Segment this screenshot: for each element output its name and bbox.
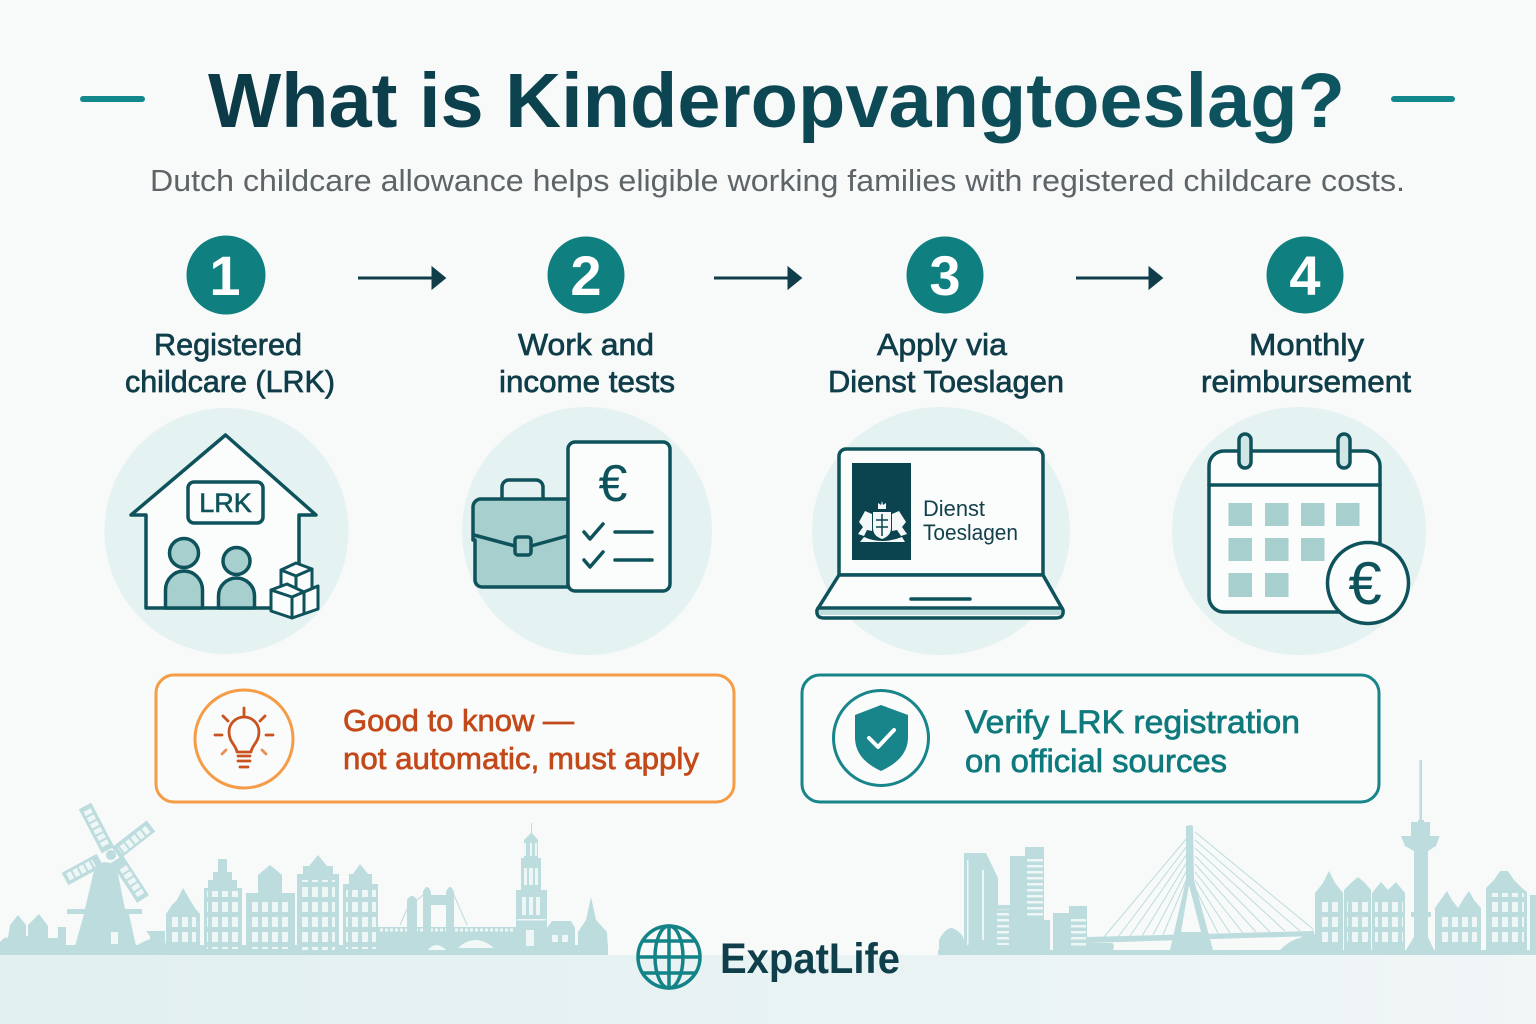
step 4 number badge: 4 xyxy=(1289,244,1321,307)
step 2 number badge: 2 xyxy=(570,244,602,307)
left skyline: windmill, canal houses, bridge, church xyxy=(0,806,608,955)
icon: calendar with euro coin: € xyxy=(1348,550,1382,617)
church tower xyxy=(516,823,547,950)
step 1 label xyxy=(125,327,335,399)
arrow 3 to 4 xyxy=(1076,269,1161,287)
small buildings and church xyxy=(547,897,608,950)
canal house 1 xyxy=(166,888,200,950)
icon: calendar with euro coin xyxy=(1172,407,1426,655)
callout text: not automatic, must apply xyxy=(343,741,700,776)
step 3 label: Dienst Toeslagen xyxy=(828,364,1064,399)
step 2 number badge xyxy=(548,236,624,314)
right skyline: towers, Erasmus bridge, houses, Euromast xyxy=(938,760,1536,955)
step 3 label xyxy=(828,327,1064,399)
low trees xyxy=(939,928,964,950)
title: What is Kinderopvangtoeslag? xyxy=(208,58,1345,144)
logo: ExpatLife xyxy=(638,926,900,988)
icon: laptop with Dienst Toeslagen: Dienst xyxy=(923,496,986,521)
arrow 1 to 2 xyxy=(358,269,444,287)
logo: ExpatLife: ExpatLife xyxy=(720,935,900,983)
step 4 xyxy=(1172,236,1426,655)
step 2 label: Work and xyxy=(518,327,654,362)
icon: shield with check xyxy=(834,690,928,786)
callout: verify LRK xyxy=(802,675,1379,802)
subtitle: Dutch childcare allowance helps eligible working families with registered childcare costs. xyxy=(150,163,1405,198)
canal house 5 xyxy=(343,864,378,950)
icon: registered childcare house: LRK xyxy=(199,488,252,518)
trees and low buildings xyxy=(0,914,165,950)
title accent line right xyxy=(1391,96,1455,102)
callout: good to know xyxy=(156,675,734,802)
step 4 label: Monthly xyxy=(1249,327,1365,362)
step 3 number badge xyxy=(906,236,984,314)
Erasmus bridge xyxy=(1087,825,1320,950)
step 2 label xyxy=(499,327,675,399)
canal house 4 xyxy=(297,855,339,950)
canal house 2 xyxy=(204,859,242,950)
step 2 label: income tests xyxy=(499,364,675,399)
Euromast xyxy=(1401,760,1440,950)
icon: laptop with Dienst Toeslagen xyxy=(812,407,1070,655)
callout text: Good to know — xyxy=(343,703,574,738)
callout text: Verify LRK registration xyxy=(965,704,1300,740)
step 1 label: Registered xyxy=(154,327,302,362)
lifting bridge xyxy=(378,887,516,950)
icon: briefcase and income document xyxy=(462,407,712,655)
step 1 number badge: 1 xyxy=(209,244,241,307)
office towers xyxy=(964,847,1087,950)
icon: laptop with Dienst Toeslagen: Toeslagen xyxy=(923,520,1018,545)
canal house 3 xyxy=(246,865,295,950)
title accent line left xyxy=(80,96,145,102)
canal houses right xyxy=(1315,871,1405,950)
step 1 label: childcare (LRK) xyxy=(125,364,335,399)
callout text: on official sources xyxy=(965,743,1227,779)
icon: briefcase and income document: € xyxy=(599,455,628,513)
icon: light bulb xyxy=(195,690,293,788)
canal houses far right xyxy=(1435,871,1527,950)
step 1 number badge xyxy=(186,236,266,314)
crest on the logo panel xyxy=(858,501,907,542)
step 4 number badge xyxy=(1266,236,1344,314)
callout text xyxy=(965,704,1300,779)
step 3 number badge: 3 xyxy=(929,244,961,307)
step 2 xyxy=(462,236,712,655)
icon: registered childcare house xyxy=(104,408,348,654)
step 4 label: reimbursement xyxy=(1201,364,1411,399)
arrow 2 to 3 xyxy=(714,269,800,287)
step 4 label xyxy=(1201,327,1411,399)
bottom pale water band xyxy=(0,955,1536,1024)
step 3 label: Apply via xyxy=(877,327,1008,362)
callout text xyxy=(343,703,700,776)
windmill xyxy=(65,806,151,946)
step 3 xyxy=(812,236,1070,655)
icon: globe xyxy=(638,926,700,988)
step 1 xyxy=(104,236,348,654)
